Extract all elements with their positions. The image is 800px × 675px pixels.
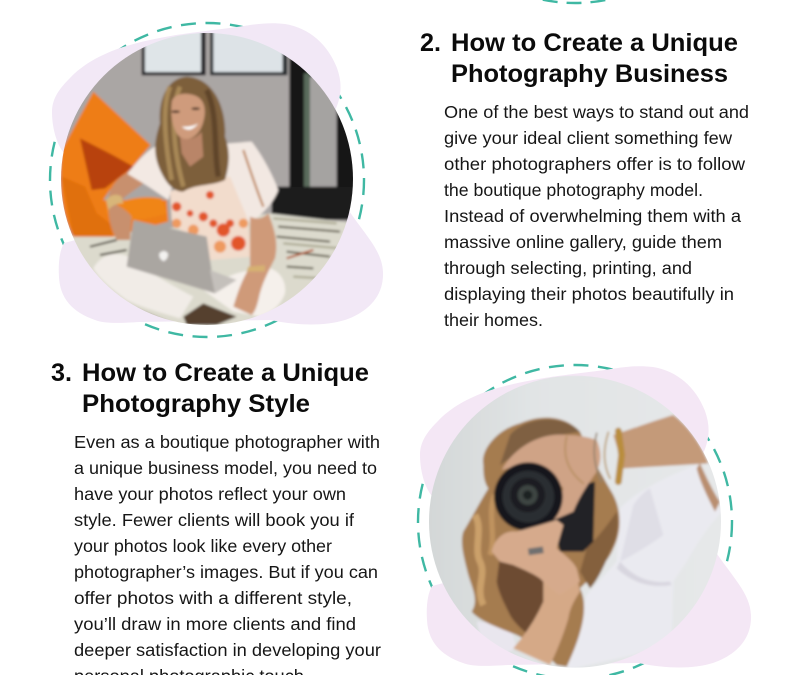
arm (108, 173, 143, 240)
text block: section 3 body: style. Fewer clients will book you if (74, 510, 354, 530)
text block: section 3 body: you’ll draw in more clients and find (74, 614, 356, 634)
text block: section 3 body: deeper satisfaction in developing your (74, 640, 381, 660)
lilac blob (420, 366, 751, 668)
heading: section 2 (420, 29, 738, 88)
text block: section 3 body: a unique business model, you need to (74, 458, 377, 478)
photo: woman with laptop (57, 27, 357, 330)
text block: section 3 body: offer photos with a different style, (74, 588, 352, 608)
text block: section 3 body: have your photos reflect your own (74, 484, 346, 504)
text block: section 2 body: the boutique photography model. (444, 180, 703, 200)
text block: section 2 body: One of the best ways to stand out and (444, 102, 749, 122)
rug (72, 211, 346, 325)
text block: section 3 body (74, 432, 381, 675)
heading: section 3: 3. (51, 359, 72, 387)
panel: photo of photographer with camera (418, 365, 751, 675)
text block: section 2 body: Instead of overwhelming them with a (444, 206, 741, 226)
heading: section 3: How to Create a Unique (82, 359, 369, 387)
blouse (127, 147, 177, 200)
heading: section 2: 2. (420, 29, 441, 57)
photo: woman aiming camera (427, 375, 727, 675)
text block: section 2 body: other photographers offer is to follow (444, 154, 746, 174)
text block: section 2 body (444, 102, 749, 330)
heading: section 3 (51, 359, 369, 418)
hair (462, 418, 620, 667)
text block: section 3 body: Even as a boutique photographer with (74, 432, 380, 452)
dashed teal ring (418, 365, 732, 675)
bracelets (565, 431, 622, 483)
top hand (502, 435, 600, 522)
text block: section 3 body: your photos look like every other (74, 536, 332, 556)
panel: photo of photographer with laptop (50, 23, 383, 337)
text block: section 2 body: massive online gallery, guide them (444, 232, 722, 252)
pants (93, 254, 193, 318)
hair (155, 77, 229, 192)
other arm (233, 213, 276, 315)
heading: section 2: How to Create a Unique (451, 29, 738, 57)
shirt (568, 500, 648, 668)
text block: section 2 body: through selecting, printing, and (444, 258, 692, 278)
text block: section 3 body: photographer’s images. But if you can (74, 562, 378, 582)
text block: section 2 body: their homes. (444, 310, 543, 330)
text block: section 2 body: give your ideal client something few (444, 128, 733, 148)
face (171, 94, 205, 139)
dashed ring: previous section fragment (418, 0, 732, 3)
laptop (127, 220, 215, 293)
heading: section 3: Photography Style (82, 390, 310, 418)
camera body (550, 482, 595, 552)
bottom hand (490, 518, 581, 584)
raised arm (613, 415, 708, 468)
lilac blob (52, 23, 383, 324)
lens (494, 462, 563, 531)
heading: section 2: Photography Business (451, 60, 728, 88)
orange chair (61, 92, 168, 237)
dashed teal ring (50, 23, 364, 337)
text block: section 2 body: displaying their photos beautifully in (444, 284, 734, 304)
bottom arm (513, 575, 580, 665)
